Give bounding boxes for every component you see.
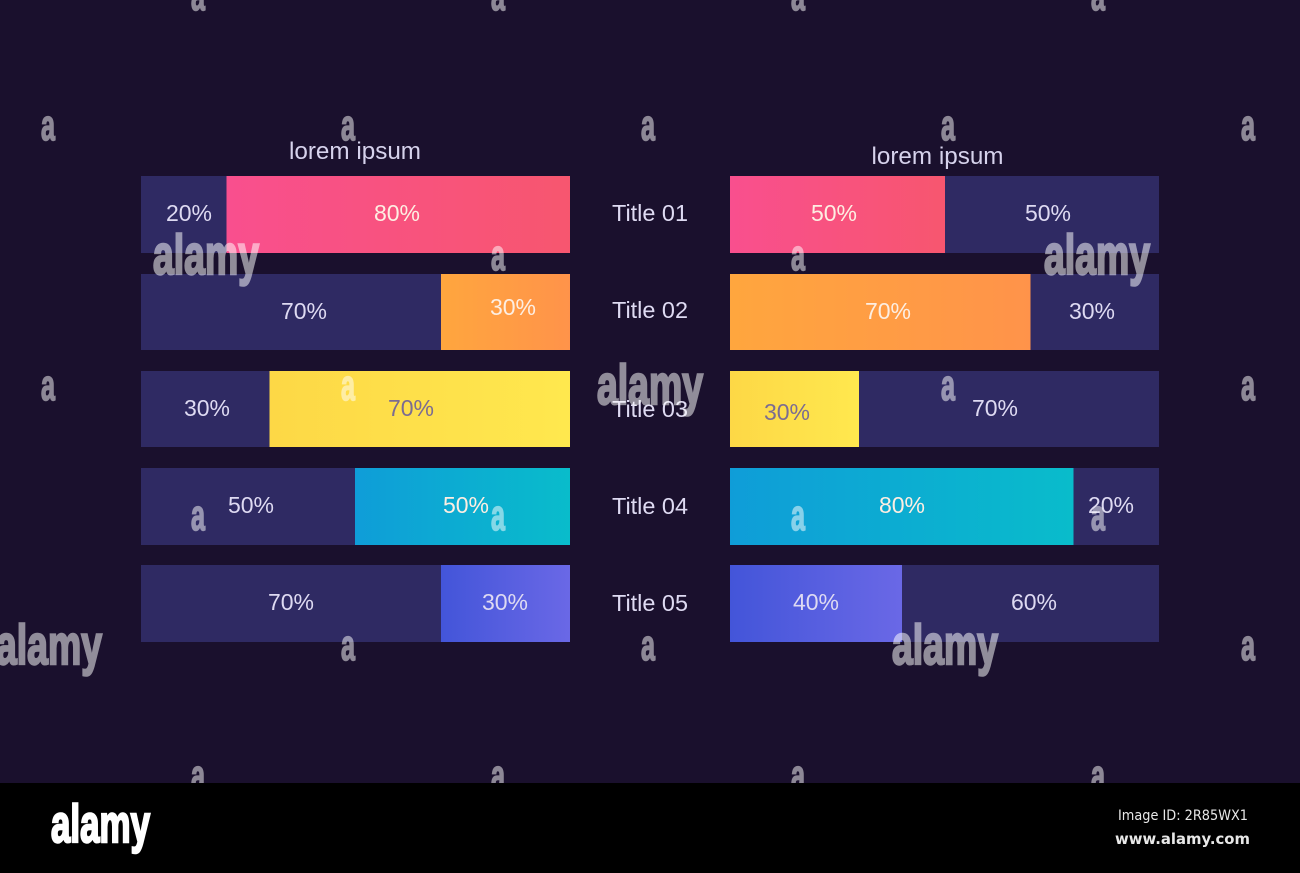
watermark pattern: a: [1241, 361, 1255, 410]
watermark pattern: a: [341, 361, 355, 410]
left bar row 1: [141, 176, 570, 253]
footer bar: [0, 783, 1300, 873]
watermark pattern: a: [1241, 621, 1255, 670]
left bar row 1: 80%: [374, 200, 420, 226]
watermark pattern: a: [941, 361, 955, 410]
panel: right stacked bars: [730, 176, 1159, 642]
right bar row 1: [730, 176, 1159, 253]
left bar row 3: 30%: [184, 395, 230, 421]
right bar row 2: 30%: [1069, 298, 1115, 324]
watermark pattern: alamy: [597, 353, 703, 416]
title 05: Title 05: [612, 590, 688, 616]
watermark pattern: a: [191, 491, 205, 540]
title 04: Title 04: [612, 493, 688, 519]
right chart heading: lorem ipsum: [872, 143, 1004, 170]
watermark pattern: a: [491, 231, 505, 280]
watermark pattern: a: [791, 491, 805, 540]
watermark pattern: alamy: [153, 223, 259, 286]
left bar row 5: [141, 565, 570, 642]
panel: left stacked bars: [141, 176, 570, 642]
watermark pattern: a: [791, 231, 805, 280]
watermark pattern: a: [1241, 101, 1255, 150]
left bar row 5: 30%: [482, 589, 528, 615]
right bar row 4: 80%: [879, 492, 925, 518]
watermark pattern: a: [491, 751, 505, 800]
watermark pattern: a: [191, 751, 205, 800]
left chart heading: lorem ipsum: [289, 138, 421, 165]
footer logo: alamy: [51, 795, 150, 854]
left bar row 4: 50%: [228, 492, 274, 518]
right bar row 5: 40%: [793, 589, 839, 615]
watermark pattern: a: [1091, 751, 1105, 800]
watermark pattern: a: [341, 621, 355, 670]
image id: Image ID: 2R85WX1: [1118, 808, 1248, 824]
title 01: Title 01: [612, 200, 688, 226]
right bar row 1: 50%: [1025, 200, 1071, 226]
watermark pattern: a: [341, 101, 355, 150]
right bar row 5: 60%: [1011, 589, 1057, 615]
watermark pattern: alamy: [0, 613, 102, 676]
left bar row 5: 70%: [268, 589, 314, 615]
left bar row 3: 70%: [388, 395, 434, 421]
right bar row 5: [730, 565, 1159, 642]
watermark pattern: alamy: [892, 613, 998, 676]
right bar row 2: 70%: [865, 298, 911, 324]
watermark pattern: a: [41, 361, 55, 410]
right bar row 3: 70%: [972, 395, 1018, 421]
watermark pattern: a: [491, 491, 505, 540]
left bar row 2: [141, 274, 570, 350]
watermark pattern: a: [941, 101, 955, 150]
right bar row 1: 50%: [811, 200, 857, 226]
left bar row 4: 50%: [443, 492, 489, 518]
watermark pattern: a: [641, 101, 655, 150]
watermark pattern: a: [41, 101, 55, 150]
watermark pattern: a: [1091, 491, 1105, 540]
watermark pattern: a: [791, 751, 805, 800]
left bar row 2: 70%: [281, 298, 327, 324]
watermark pattern: alamy: [1044, 223, 1150, 286]
right bar row 3: [730, 371, 1159, 447]
right bar row 3: 30%: [764, 399, 810, 425]
left bar row 4: [141, 468, 570, 545]
left bar row 3: [141, 371, 570, 447]
website: www.alamy.com: [1115, 830, 1250, 848]
right bar row 4: [730, 468, 1159, 545]
watermark pattern: a: [641, 621, 655, 670]
title 03: Title 03: [612, 396, 688, 422]
left bar row 1: 20%: [166, 200, 212, 226]
right bar row 2: [730, 274, 1159, 350]
title 02: Title 02: [612, 297, 688, 323]
panel: row titles: [612, 200, 688, 616]
right bar row 4: 20%: [1088, 492, 1134, 518]
left bar row 2: 30%: [490, 294, 536, 320]
